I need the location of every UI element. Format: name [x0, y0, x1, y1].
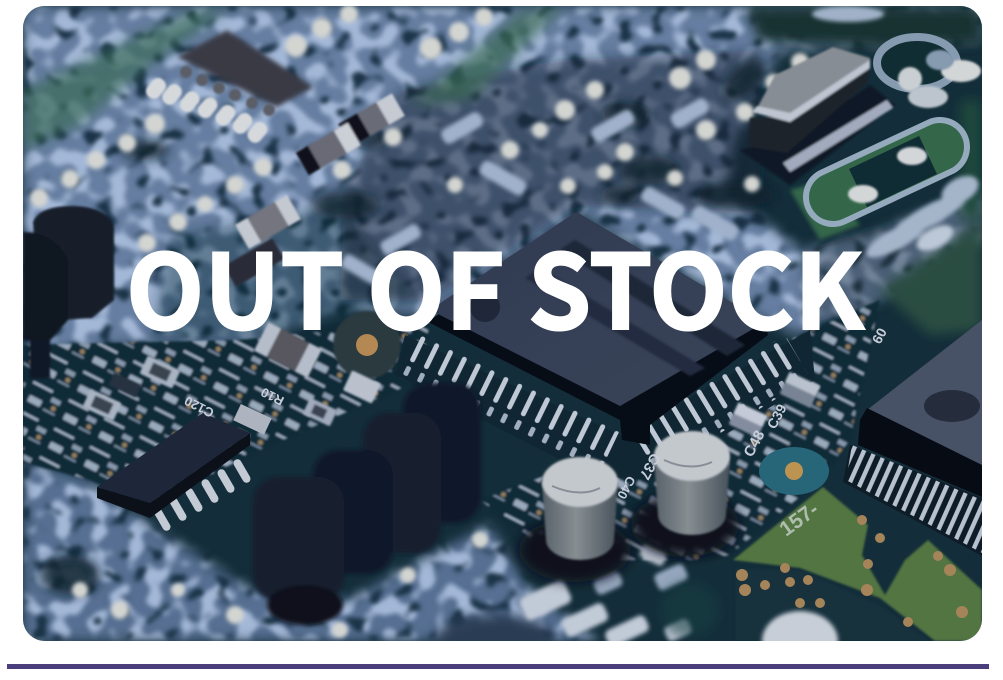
blurred white parts bottom centre [517, 543, 693, 648]
main chip with pins [395, 212, 815, 480]
bottom rule [7, 664, 989, 669]
green board areas [23, 6, 565, 150]
traced ring top right [877, 37, 981, 108]
soft dark shape bottom centre [433, 606, 561, 641]
small SMD parts top-left [224, 93, 405, 378]
small parts near chip [82, 355, 820, 438]
bottom dark capacitors [253, 383, 481, 625]
traces fields [23, 300, 880, 560]
printed labels on board: C48 [741, 428, 768, 460]
big blurred solder ball bottom [758, 608, 842, 641]
dark pockets between parts [40, 52, 775, 595]
darker board zones in the field [150, 50, 982, 340]
printed labels on board: 157- [775, 498, 823, 541]
black SOIC chip lower-left [97, 404, 272, 532]
traced oval mid right [833, 147, 940, 203]
electrolytic capacitor left [519, 457, 631, 582]
lower component field [23, 460, 602, 641]
teal pad [759, 447, 829, 495]
electrolytic capacitor right [631, 431, 739, 557]
green PCB copper fill bottom-right [733, 487, 982, 641]
left dark cylinders [23, 206, 114, 378]
bright solder dots [30, 5, 809, 638]
pads on board bottom-right [736, 515, 968, 627]
pad orange [333, 311, 401, 379]
printed labels on board: C120 [182, 393, 216, 421]
printed labels on board: 60 [869, 325, 890, 346]
printed labels on board [182, 325, 890, 541]
dark green gap bottom [660, 582, 720, 638]
printed labels on board: C39 [764, 401, 790, 431]
printed labels on board: C40 [614, 474, 639, 502]
printed labels on board: R10 [258, 384, 286, 409]
title: OUT OF STOCK [126, 210, 865, 359]
top-left chip [143, 30, 313, 146]
crystal oscillator [740, 47, 895, 185]
bright parts in the darker zone [339, 96, 741, 287]
printed labels on board: C37 [636, 450, 663, 482]
upper component field [23, 6, 982, 358]
light parts under oval [862, 170, 983, 264]
right chip [843, 320, 982, 556]
